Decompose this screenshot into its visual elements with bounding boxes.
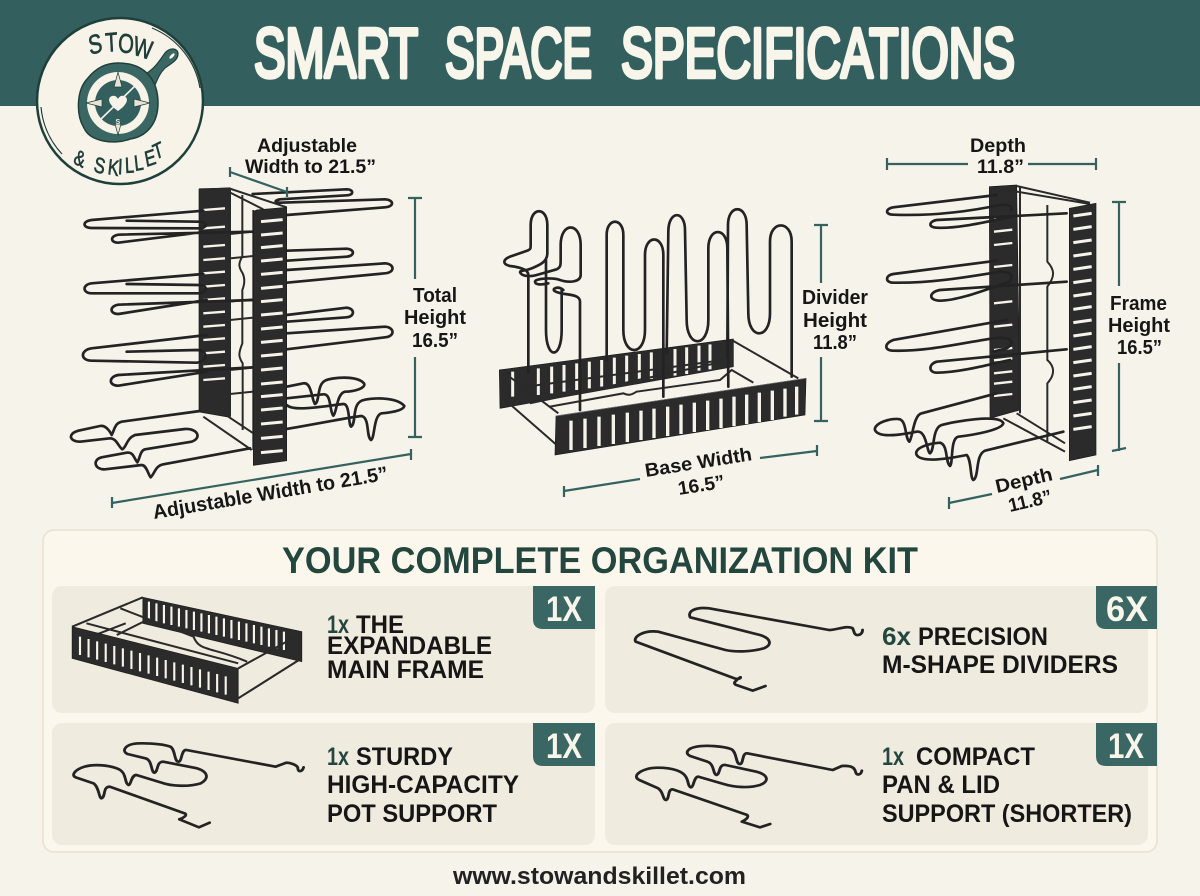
label: divider height: Height [803,310,867,332]
title: SPACE [445,14,592,92]
label: total height: Height [404,307,466,329]
text: main frame [327,611,492,684]
text: main frame: THE [356,611,404,639]
pot support wires [504,211,581,410]
label: top depth: Depth [970,136,1026,157]
dimension: divider height [814,225,828,421]
dimension: base width [564,445,817,497]
label: bottom depth: Depth [993,464,1055,498]
right wire loops [253,189,392,349]
label: total height: Total [413,285,457,307]
logo: Stow & Skillet [37,18,203,184]
badge 1x: 1X [546,727,583,766]
back panel [199,188,230,417]
label: frame height: 16.5” [1117,337,1162,359]
text: dividers [882,623,1118,679]
dimension: frame height [1112,202,1126,451]
frame bars [199,189,287,450]
left wire loops [83,211,253,386]
dimension: bottom width [112,449,411,508]
logo wordmark top: STOW [86,27,155,67]
dimension: top width left rack [230,167,287,197]
diagram: middle base with dividers [499,209,806,455]
wire loops [886,195,1067,373]
label: bottom depth: 11.8” [1006,487,1054,517]
logo wordmark bottom: & SKILLET [71,137,166,182]
text: pan support: SUPPORT (SHORTER) [882,800,1132,828]
label: divider height [802,287,868,354]
text: pot support: 1x [327,743,349,771]
dimension: bottom depth [949,465,1098,509]
badge 1x [1096,723,1157,766]
label: adjustable width bottom: Adjustable Width to 21.5” [151,463,390,524]
back panel [989,185,1020,418]
label: adjustable width top: Width to 21.5” [245,157,376,178]
text: pan support: 1x [882,743,904,771]
label: frame height: Frame [1110,293,1167,315]
label: base width: 16.5” [676,472,726,500]
card: m-shape dividers [605,586,1157,713]
icon: m-shape divider [635,608,863,691]
icon: pot support wire [74,743,304,827]
text: pot support: HIGH-CAPACITY [327,771,519,799]
text: dividers: 6x [882,623,911,651]
icon: skillet compass: S [116,119,120,126]
kit heading: YOUR COMPLETE ORGANIZATION KIT [282,540,918,581]
label: base width: Base Width [643,444,753,482]
back panel [499,339,733,408]
label: top depth [970,136,1026,178]
dimension: top depth [887,158,1096,170]
label: divider height: 11.8” [813,332,857,354]
label: adjustable width top: Adjustable [257,136,357,157]
left feet [71,411,250,477]
text: pan support: COMPACT [916,743,1035,771]
label: frame height: Height [1108,315,1170,337]
badge 1x [533,723,595,766]
label: divider height: Divider [802,287,868,309]
text: main frame: MAIN FRAME [327,656,484,684]
front panel [253,207,287,465]
label: total height: 16.5” [412,330,458,352]
header band [0,0,1200,106]
label: base width [643,444,753,500]
card: main frame [52,586,595,713]
title: SPECIFICATIONS [621,14,1015,92]
dimension: total height [408,198,422,437]
icon: expandable frame [72,597,302,703]
badge 1x: 1X [1108,727,1145,766]
text: pot support: POT SUPPORT [327,800,497,828]
label: frame height [1108,293,1170,359]
card: pot support [52,723,595,845]
diagram: left rack [71,188,404,477]
title: SMART [254,14,418,92]
badge 6x [1096,586,1157,629]
panel: organization kit [43,530,1157,852]
icon: pan support wire [636,746,862,827]
right feet [287,378,404,440]
badge 1x: 1X [546,590,583,629]
text: dividers: PRECISION [918,623,1048,651]
label: bottom depth [993,464,1055,517]
footer url: www.stowandskillet.com [452,863,746,890]
rails [503,340,798,445]
text: pan support [882,743,1132,828]
label: adjustable width top [245,136,376,178]
label: top depth: 11.8” [977,157,1024,178]
text: pot support [327,743,519,828]
text: dividers: M-SHAPE DIVIDERS [882,651,1118,679]
feet [875,393,1063,480]
text: main frame: 1x [327,611,349,639]
title [254,14,1015,92]
badge 6x: 6X [1106,590,1149,629]
icon: skillet compass [78,49,178,142]
frame bars [992,186,1090,452]
text: main frame: EXPANDABLE [327,632,492,660]
divider wires [607,209,792,397]
label: total height [404,285,466,352]
card: pan and lid support [605,723,1157,845]
diagram: right rack [875,185,1096,480]
badge 1x [533,586,595,629]
front panel [555,378,806,455]
text: pan support: PAN & LID [882,771,1000,799]
text: pot support: STURDY [356,743,453,771]
front panel [1069,203,1096,461]
